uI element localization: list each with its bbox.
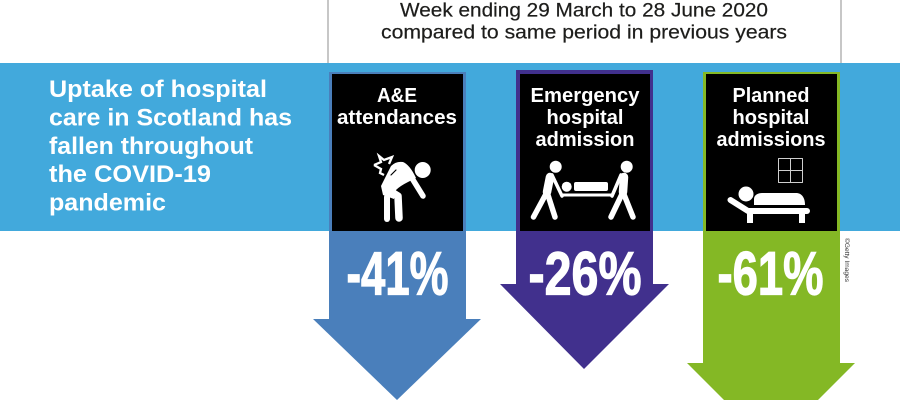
headline text: care in Scotland has xyxy=(49,104,292,132)
headline text xyxy=(49,76,292,216)
label: Planned hospital admissions: Planned xyxy=(732,84,810,107)
label: Emergency hospital admission: hospital xyxy=(546,106,624,129)
period heading: Week ending 29 March to 28 June 2020 xyxy=(400,0,768,22)
icon: two people carrying stretcher xyxy=(534,161,633,217)
blue band xyxy=(0,63,900,231)
period heading xyxy=(381,0,787,44)
headline text: the COVID-19 xyxy=(49,161,211,188)
period heading: compared to same period in previous years xyxy=(381,22,787,44)
label: A&E attendances: A&E xyxy=(377,84,417,107)
icon: person with back pain xyxy=(374,156,431,219)
arrow: planned down 61% xyxy=(687,72,855,400)
headline text: pandemic xyxy=(49,190,166,216)
panel: A&E attendances xyxy=(313,72,481,400)
label: Planned hospital admissions: hospital xyxy=(732,106,810,129)
arrow: emergency down 26% xyxy=(500,70,669,369)
label: Emergency hospital admission: admission xyxy=(536,128,634,151)
black card: A&E xyxy=(332,74,463,231)
label: A&E attendances: attendances xyxy=(337,106,457,129)
black card: planned xyxy=(706,74,837,231)
photo credit: ©Getty Images xyxy=(843,238,851,283)
label: A&E attendances xyxy=(337,84,457,129)
icon: patient in bed with window xyxy=(730,158,807,223)
panel: Planned hospital admissions xyxy=(687,72,855,400)
black card: emergency xyxy=(520,74,650,231)
period bracket xyxy=(328,0,841,63)
label: Planned hospital admissions xyxy=(716,84,826,151)
label: Planned hospital admissions: admissions xyxy=(716,128,826,151)
value: -41%: -41% xyxy=(346,240,448,308)
panel: Emergency hospital admission xyxy=(500,70,669,369)
label: Emergency hospital admission xyxy=(530,84,640,151)
arrow: A&E down 41% xyxy=(313,72,481,400)
value: -61%: -61% xyxy=(718,240,824,308)
value: -26%: -26% xyxy=(528,240,642,308)
headline text: fallen throughout xyxy=(49,133,253,160)
label: Emergency hospital admission: Emergency xyxy=(530,84,640,107)
headline text: Uptake of hospital xyxy=(49,76,267,103)
